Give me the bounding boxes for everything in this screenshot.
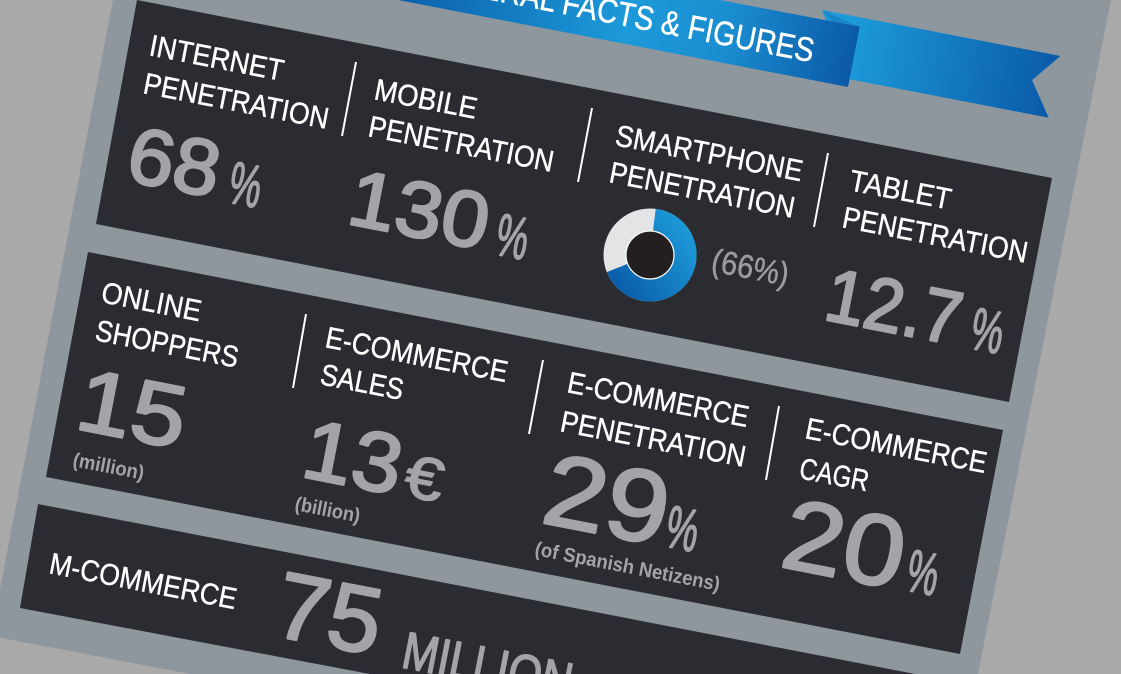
online shoppers: (million) [71,449,146,485]
panel: penetration [96,0,1052,402]
mobile penetration: 130 [342,152,497,267]
e-commerce sales: 13 [296,401,411,513]
internet penetration [121,29,332,221]
e-commerce cagr: E-COMMERCE [803,412,990,480]
m-commerce label: M-COMMERCE [47,547,239,616]
online shoppers: 15 [69,349,195,467]
e-commerce sales: SALES [318,358,406,407]
m-commerce value: 75 [267,552,391,674]
e-commerce penetration: 29 [535,432,679,567]
e-commerce cagr: % [902,537,945,609]
internet penetration: 68 [121,109,228,214]
e-commerce sales: € [400,442,450,515]
e-commerce penetration: (of Spanish Netizens) [533,538,722,596]
ribbon tail [822,10,1060,118]
mobile penetration [342,73,557,273]
tablet penetration: 12.7 [819,252,969,361]
smartphone penetration: PENETRATION [607,156,798,225]
panel: m-commerce [20,504,915,674]
e-commerce sales: E-COMMERCE [323,321,511,389]
ribbon fold [822,10,860,45]
smartphone penetration [604,119,805,302]
e-commerce sales: (billion) [293,493,362,528]
e-commerce cagr [774,412,990,611]
tablet penetration [819,164,1031,367]
tablet penetration: % [966,295,1010,367]
ribbon front [398,0,860,87]
e-commerce penetration: E-COMMERCE [565,366,752,434]
tablet penetration: TABLET [847,164,954,217]
donut chart 66% [604,208,697,302]
panel: e-commerce [46,252,1003,654]
internet penetration: % [224,149,268,221]
mobile penetration: PENETRATION [366,110,557,179]
ribbon banner [398,0,1060,118]
mobile penetration: MOBILE [372,73,480,126]
tablet penetration: PENETRATION [840,201,1031,270]
mobile penetration: % [491,201,535,273]
e-commerce penetration: PENETRATION [558,405,749,474]
smartphone penetration: SMARTPHONE [613,119,805,188]
e-commerce cagr: 20 [774,478,915,611]
smartphone penetration: (66%) [709,242,792,293]
e-commerce cagr: CAGR [797,452,872,498]
internet penetration: PENETRATION [141,67,332,136]
online shoppers: ONLINE [99,276,204,328]
e-commerce penetration [533,366,752,596]
internet penetration: INTERNET [147,29,286,88]
online shoppers [69,276,241,485]
online shoppers: SHOPPERS [93,314,241,375]
e-commerce sales [293,321,511,528]
e-commerce penetration: % [661,493,705,565]
